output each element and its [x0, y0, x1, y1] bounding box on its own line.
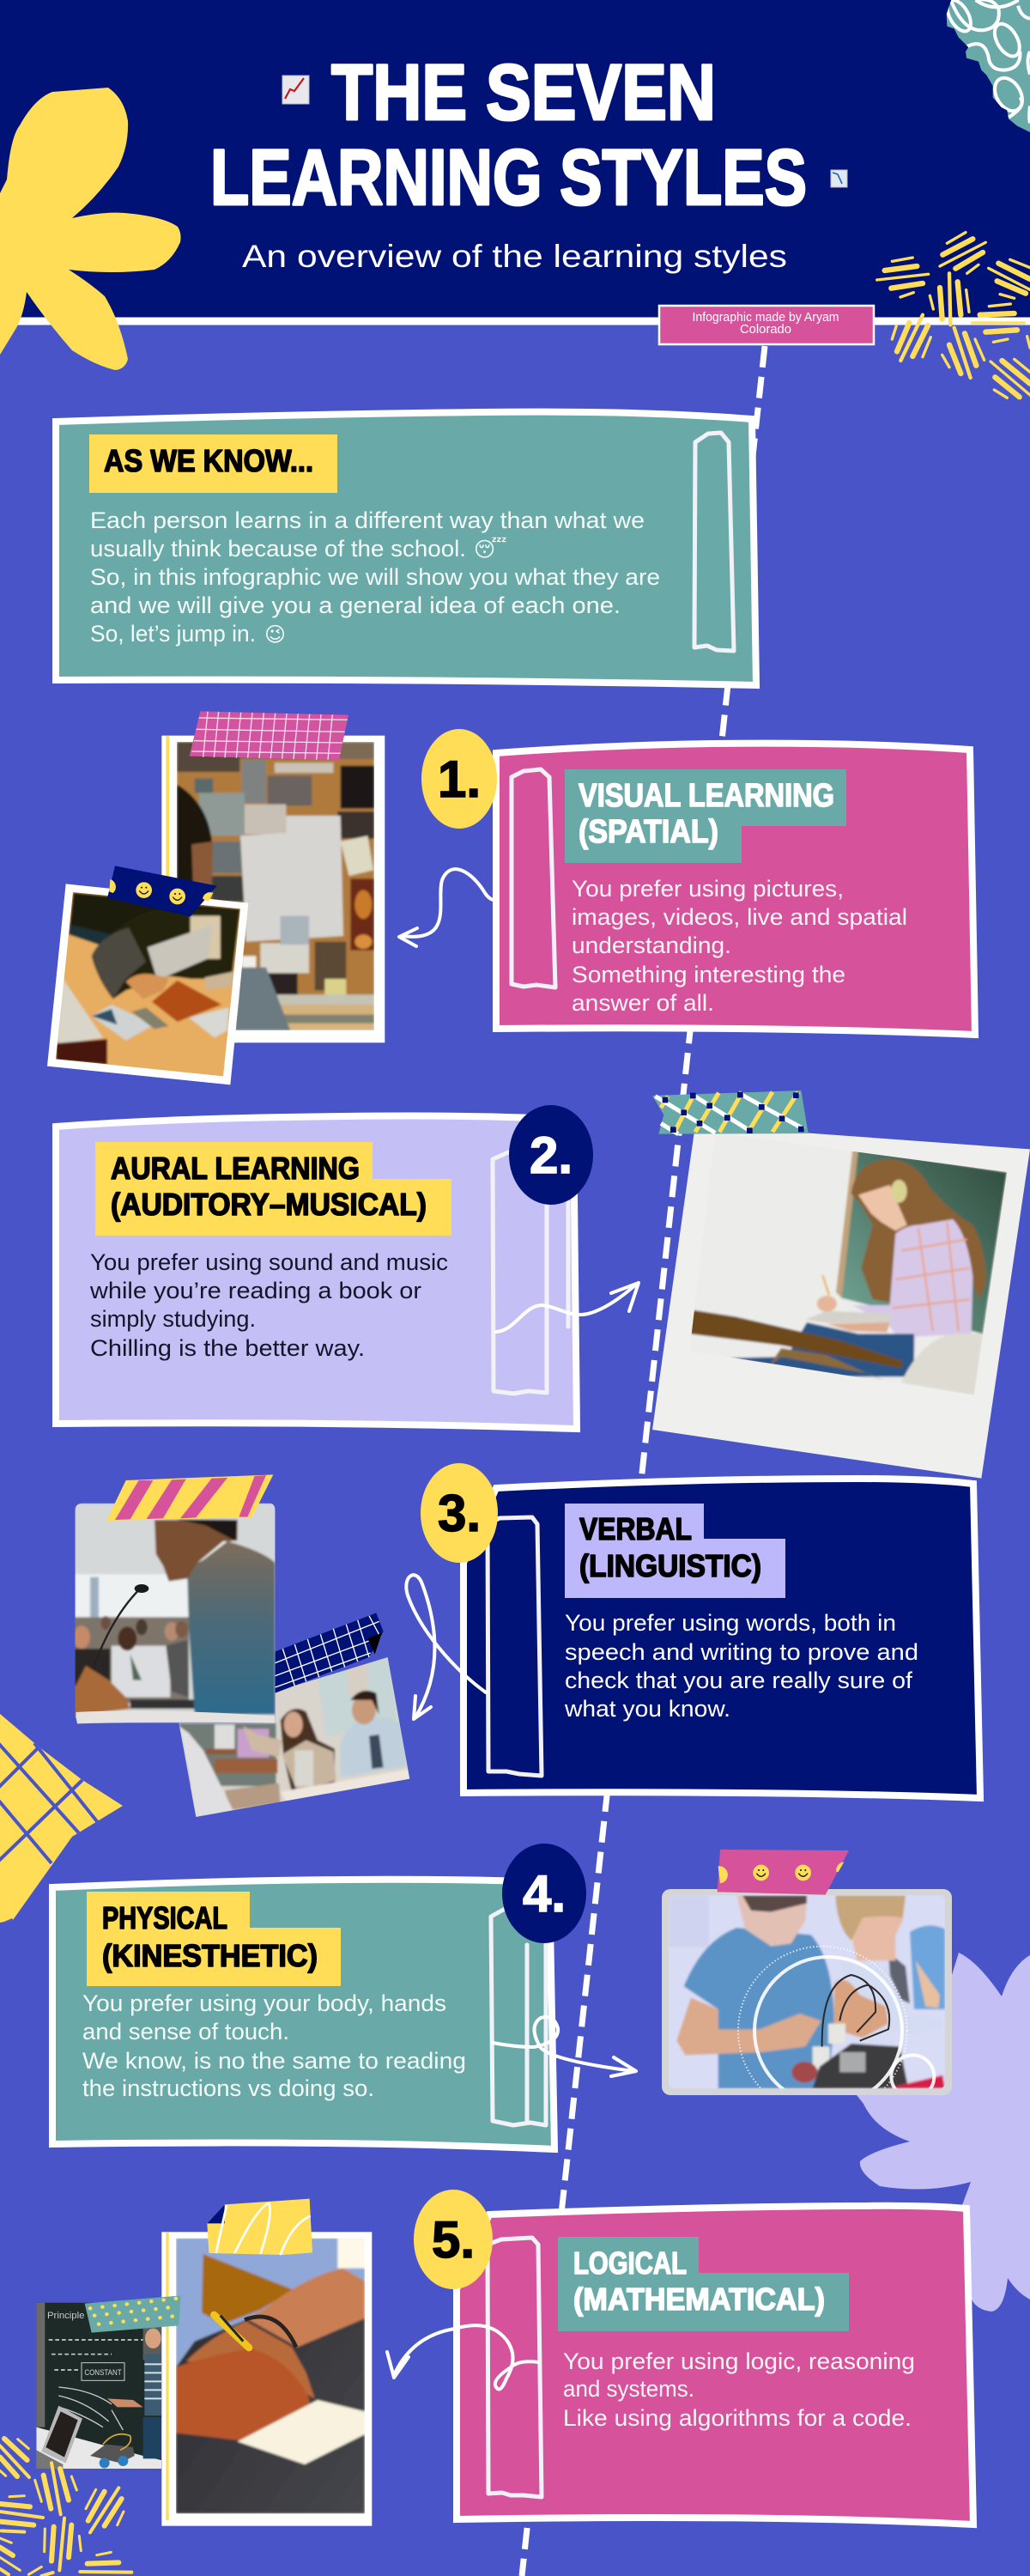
heading: verbal: VERBAL [579, 1511, 692, 1546]
body text: You prefer using logic, reasoning [563, 2348, 915, 2374]
subtitle: An overview of the learning styles [242, 239, 787, 274]
panel: physical [52, 1880, 554, 2149]
number badge 3 [421, 1463, 498, 1563]
body text: simply studying. [90, 1306, 256, 1332]
panel: aural learning [56, 1116, 577, 1429]
title line 2: LEARNING STYLES [210, 134, 807, 222]
body text [82, 1990, 466, 2101]
icon: chart falling [831, 170, 847, 187]
body text: usually think because of the school. [90, 536, 466, 562]
tab strip [488, 2238, 542, 2497]
number badge 5 [414, 2190, 493, 2289]
tab strip [493, 1152, 547, 1394]
body text: and sense of touch. [82, 2019, 289, 2044]
decoration: yellow sunburst strokes, top right [877, 233, 1030, 398]
photo group 1 [47, 711, 385, 1084]
body text [563, 2348, 915, 2431]
photo: girl with headphones [652, 1091, 1030, 1479]
number badge 3: 3. [438, 1485, 481, 1542]
body text: understanding. [572, 933, 731, 958]
heading: visual learning [565, 769, 846, 863]
body text: speech and writing to prove and [565, 1639, 918, 1665]
body text: answer of all. [572, 990, 714, 1016]
photo group 3 [73, 1474, 412, 1820]
body text: So, let’s jump in. [90, 621, 256, 647]
tape: yellow swirl [207, 2199, 312, 2255]
title line 1: THE SEVEN [331, 49, 716, 137]
number badge 2: 2. [530, 1127, 573, 1184]
body text [572, 876, 907, 1016]
decoration: lavender flower [857, 1953, 1030, 2312]
photo: hand writing with pen [161, 2232, 372, 2526]
heading: physical [87, 1892, 341, 1986]
credit label: Infographic made by Aryam [692, 310, 839, 325]
number badge 1: 1. [438, 750, 481, 808]
icon: chart rising [282, 76, 309, 104]
body text [564, 1610, 918, 1722]
arrow: panel 4 to photo [493, 2017, 636, 2076]
tab strip [491, 1908, 546, 2125]
photo: speaker with microphone [73, 1503, 276, 1723]
credit label: Colorado [740, 322, 791, 337]
body text [90, 507, 660, 647]
body text: Each person learns in a different way than what we [90, 507, 645, 533]
heading: aural learning: (AUDITORY–MUSICAL) [111, 1187, 427, 1222]
body text: Like using algorithms for a code. [563, 2405, 912, 2431]
number badge 2 [509, 1105, 593, 1205]
title [210, 49, 807, 222]
heading: physical: PHYSICAL [102, 1900, 227, 1935]
body text: while you’re reading a book or [89, 1278, 421, 1303]
heading: aural learning: AURAL LEARNING [111, 1151, 360, 1186]
photo: classroom students [178, 1655, 412, 1820]
body text: check that you are really sure of [565, 1668, 913, 1693]
photo: papers on a desk [47, 884, 248, 1084]
panel: visual learning [496, 744, 975, 1035]
heading: as we know: AS WE KNOW... [104, 443, 313, 478]
decoration: teal blob with loops [942, 0, 1030, 135]
heading: aural learning [95, 1142, 451, 1236]
photo: evidence board [161, 736, 385, 1042]
tape: navy grid [276, 1613, 384, 1693]
tape: pink yellow stripes [106, 1474, 273, 1521]
body text: and systems. [563, 2376, 694, 2402]
panel: logical [457, 2206, 973, 2524]
heading: as we know [89, 434, 337, 493]
body text: 😉 [264, 623, 286, 647]
decoration: yellow check grid [0, 1714, 123, 1923]
body text: and we will give you a general idea of each one. [90, 592, 621, 618]
body text: Something interesting the [572, 962, 845, 987]
tab strip [512, 769, 555, 987]
tab strip [694, 433, 734, 651]
tab strip [488, 1517, 542, 1776]
photo group 5 [36, 2199, 372, 2526]
heading: visual learning: (SPATIAL) [579, 814, 718, 850]
heading: visual learning: VISUAL LEARNING [579, 778, 834, 814]
body text: You prefer using sound and music [90, 1249, 448, 1275]
tape: pink smiley [718, 1850, 849, 1895]
body text: You prefer using words, both in [565, 1610, 896, 1636]
arrow: panel 1 to photo [399, 869, 509, 946]
decoration: yellow flower [0, 88, 181, 370]
body text: You prefer using pictures, [572, 876, 844, 902]
decoration: yellow sunburst strokes, bottom left [0, 2439, 131, 2576]
tape: teal check [652, 1091, 809, 1134]
heading: logical [558, 2237, 849, 2331]
timeline dashed line [522, 346, 765, 2576]
arrow: panel 5 to photos [387, 2325, 538, 2389]
body text: Chilling is the better way. [90, 1335, 365, 1361]
photo: chalkboard lecture: CONSTANT [84, 2368, 122, 2377]
number badge 1 [421, 729, 497, 829]
number badge 4 [502, 1844, 586, 1943]
header band [0, 0, 1030, 321]
body text: images, videos, live and spatial [572, 904, 907, 930]
body text [89, 1249, 448, 1361]
heading: logical: LOGICAL [573, 2245, 687, 2281]
number badge 5: 5. [432, 2211, 475, 2269]
heading: verbal [565, 1504, 785, 1598]
body text: You prefer using your body, hands [82, 1990, 446, 2016]
photo: chalkboard lecture [36, 2303, 161, 2469]
photo: boys building a robot [662, 1850, 952, 2115]
heading: physical: (KINESTHETIC) [102, 1938, 318, 1973]
heading: logical: (MATHEMATICAL) [573, 2281, 825, 2317]
panel: as we know [56, 412, 756, 685]
tape: teal dots [85, 2295, 181, 2333]
arrow: panel 2 to photo [496, 1283, 639, 1332]
body text: the instructions vs doing so. [82, 2075, 374, 2101]
body text: 😴 [474, 537, 506, 562]
credit label [659, 306, 874, 344]
arrow: panel 3 to photos [406, 1575, 486, 1719]
tape: smiley [107, 866, 217, 916]
body text: what you know. [564, 1696, 730, 1722]
photo: chalkboard lecture: Principle [47, 2311, 84, 2321]
number badge 4: 4. [523, 1865, 566, 1923]
panel: verbal [464, 1479, 980, 1798]
heading: verbal: (LINGUISTIC) [579, 1548, 761, 1583]
body text: We know, is no the same to reading [82, 2048, 466, 2074]
tape: pink grid [190, 711, 348, 760]
body text: So, in this infographic we will show you what they are [90, 564, 660, 590]
